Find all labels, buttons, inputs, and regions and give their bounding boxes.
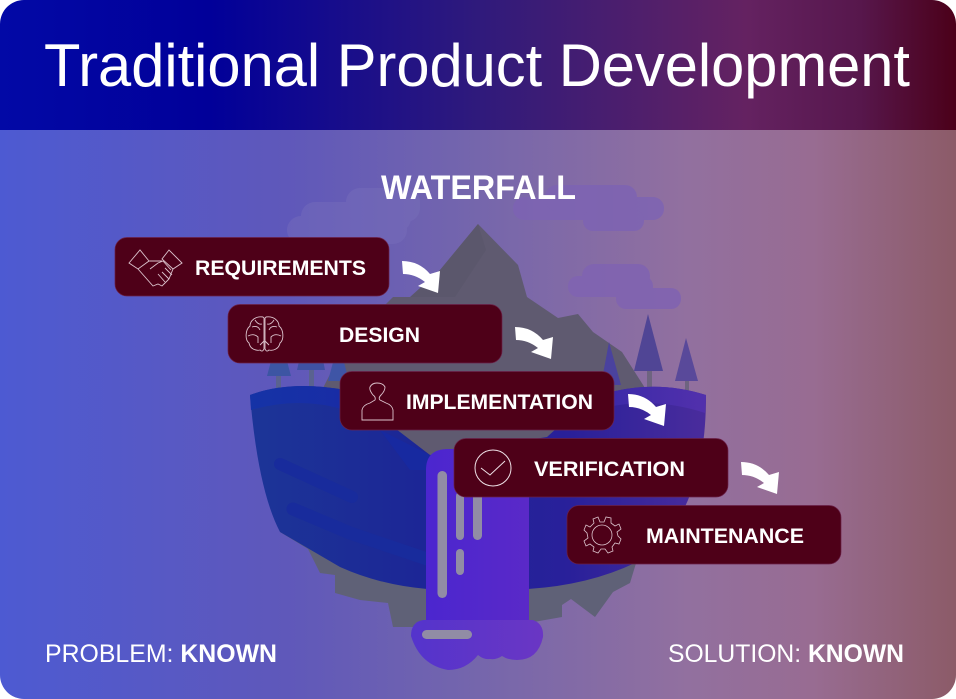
label: DESIGN: [339, 324, 420, 347]
icon: handshake: [129, 250, 182, 286]
heading: waterfall: WATERFALL: [381, 169, 576, 207]
waterfall: [411, 449, 543, 670]
tree: behind mountain right: [604, 342, 621, 385]
label: MAINTENANCE: [646, 525, 804, 548]
arrow 3: [628, 394, 666, 426]
icon: gear: [584, 517, 621, 553]
step: implementation: [340, 372, 614, 430]
cloud: middle right: [568, 264, 681, 309]
island rock underside: [280, 532, 636, 627]
title: Traditional Product Development: [44, 32, 910, 99]
icon: brain: [246, 317, 283, 351]
header band: [0, 0, 956, 130]
label: IMPLEMENTATION: [406, 391, 593, 414]
step: maintenance: [567, 506, 841, 564]
arrow 4: [741, 462, 779, 494]
arrow 2: [515, 327, 553, 359]
cloud: upper left: [287, 202, 330, 237]
arrow 1: [402, 261, 440, 293]
cloud: upper right: [513, 185, 664, 231]
trees: right group: [634, 314, 698, 398]
icon: person: [362, 383, 393, 420]
trees: left group: [267, 363, 346, 388]
icon: check circle: [475, 450, 511, 486]
footer: solution known: SOLUTION: KNOWN: [668, 640, 904, 668]
step: verification: [454, 438, 728, 497]
step: requirements: [115, 238, 389, 296]
mountain: [323, 224, 645, 460]
step: design: [228, 304, 502, 363]
lake ripples: [274, 464, 280, 470]
label: VERIFICATION: [534, 458, 685, 481]
footer: problem known: PROBLEM: KNOWN: [45, 640, 277, 668]
label: REQUIREMENTS: [195, 257, 366, 280]
island bowl: [250, 386, 706, 589]
